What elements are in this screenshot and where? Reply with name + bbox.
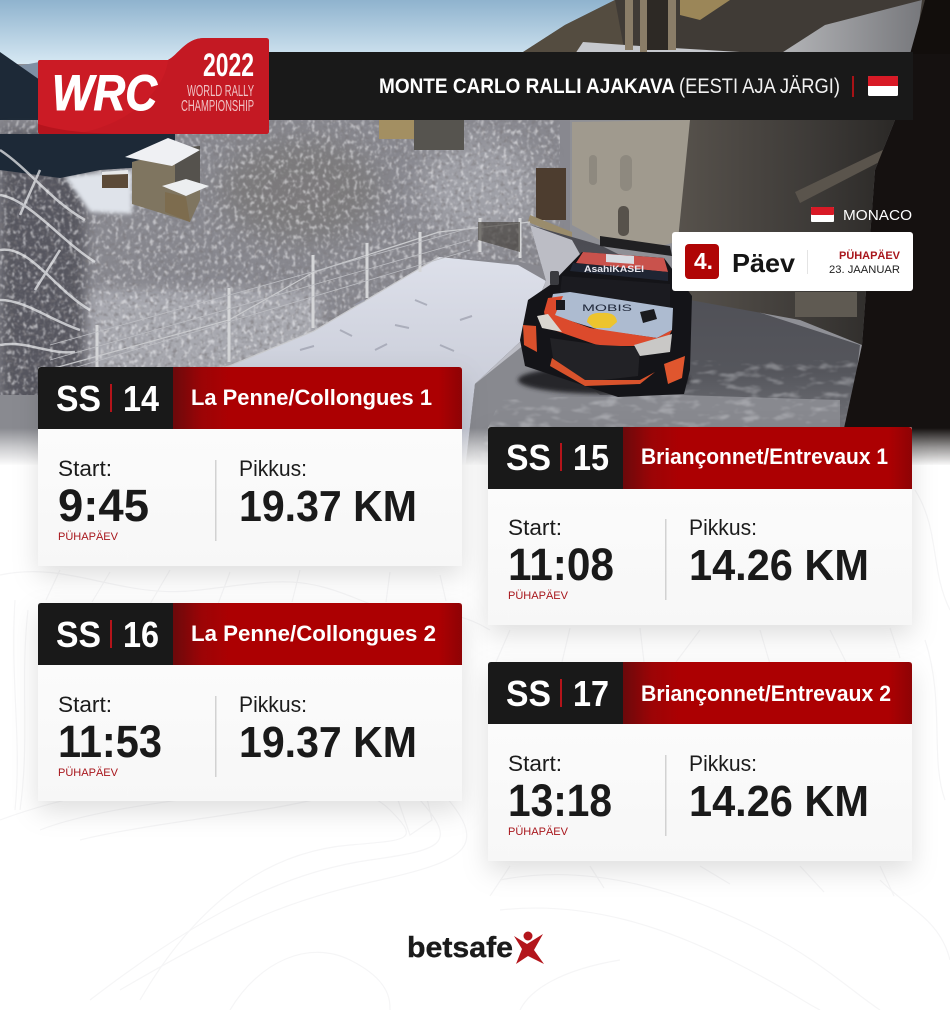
card: SS 15: SS bbox=[506, 437, 551, 478]
card: SS 17: Start: bbox=[508, 751, 562, 776]
card: SS 17: 13:18 bbox=[508, 775, 612, 826]
card: SS 15: 15 bbox=[573, 437, 609, 478]
card: SS 16: SS bbox=[56, 614, 101, 655]
card: SS 17: Pikkus: bbox=[689, 751, 757, 776]
card: SS 15: 11:08 bbox=[508, 539, 614, 590]
World Rally Championship: CHAMPIONSHIP bbox=[181, 98, 254, 115]
header bar bbox=[268, 52, 913, 120]
footprints bbox=[300, 300, 472, 351]
icon: Monaco flag bbox=[868, 76, 898, 96]
rally car: MOBIS bbox=[582, 303, 632, 313]
World Rally Championship: WORLD RALLY bbox=[187, 83, 254, 100]
card: SS 16: 16 bbox=[123, 614, 159, 655]
card: SS 16: 11:53 bbox=[58, 716, 162, 767]
houses bbox=[102, 172, 128, 188]
rally car: AsahiKASEI bbox=[584, 264, 644, 274]
card: SS 14: 14 bbox=[123, 378, 159, 419]
day badge: Päev bbox=[732, 248, 796, 278]
card: SS 17 bbox=[488, 662, 912, 861]
card: SS 14: 19.37 KM bbox=[239, 482, 417, 531]
header subtitle: (EESTI AJA JÄRGI) bbox=[679, 75, 840, 98]
card: SS 17: 14.26 KM bbox=[689, 777, 869, 826]
betsafe logo: betsafe bbox=[407, 932, 513, 964]
icon: shell emblem bbox=[587, 313, 617, 328]
card: SS 16: PÜHAPÄEV bbox=[58, 767, 119, 779]
Monaco label bbox=[811, 207, 912, 224]
WRC wordmark: WRC bbox=[52, 65, 158, 121]
card: SS 16: La Penne/Collongues 2 bbox=[191, 621, 436, 646]
day badge bbox=[672, 232, 913, 291]
rally car bbox=[518, 236, 692, 397]
card: SS 14: Start: bbox=[58, 456, 112, 481]
fence bbox=[40, 222, 530, 415]
icon: betsafe figure bbox=[514, 932, 544, 964]
WRC logo bbox=[38, 38, 269, 134]
card: SS 17: 17 bbox=[573, 673, 609, 714]
card: SS 14: La Penne/Collongues 1 bbox=[191, 385, 432, 410]
wooded slope bbox=[0, 120, 570, 420]
card: SS 15: PÜHAPÄEV bbox=[508, 590, 569, 602]
card: SS 17: PÜHAPÄEV bbox=[508, 826, 569, 838]
day badge: PÜHAPÄEV bbox=[839, 249, 901, 262]
World Rally Championship bbox=[181, 83, 254, 115]
mountains bbox=[18, 60, 60, 130]
card: SS 17: SS bbox=[506, 673, 551, 714]
card: SS 16: Pikkus: bbox=[239, 692, 307, 717]
header title: MONTE CARLO RALLI AJAKAVA bbox=[379, 75, 675, 98]
day badge: 23. JAANUAR bbox=[829, 264, 900, 276]
card: SS 15: Briançonnet/Entrevaux 1 bbox=[641, 444, 888, 469]
card: SS 16: Start: bbox=[58, 692, 112, 717]
church wall bbox=[572, 120, 690, 245]
card: SS 14 bbox=[38, 367, 462, 566]
card: SS 17: Briançonnet/Entrevaux 2 bbox=[641, 681, 891, 706]
2022: 2022 bbox=[203, 47, 254, 83]
card: SS 16 bbox=[38, 603, 462, 801]
fade from photo to white bbox=[0, 428, 950, 466]
day badge: 4. bbox=[694, 248, 713, 274]
card: SS 15 bbox=[488, 427, 912, 625]
topographic background lines bbox=[0, 490, 950, 1010]
card: SS 14: 9:45 bbox=[58, 480, 149, 531]
card: SS 15: Pikkus: bbox=[689, 515, 757, 540]
card: SS 15: Start: bbox=[508, 515, 562, 540]
background photo: snowy village road bbox=[0, 0, 950, 470]
card: SS 14: SS bbox=[56, 378, 101, 419]
card: SS 16: 19.37 KM bbox=[239, 718, 417, 767]
card: SS 14: Pikkus: bbox=[239, 456, 307, 481]
Monaco label: MONACO bbox=[843, 207, 912, 224]
card: SS 14: PÜHAPÄEV bbox=[58, 531, 119, 543]
snow field bbox=[0, 257, 546, 470]
card: SS 15: 14.26 KM bbox=[689, 541, 869, 590]
road bbox=[465, 225, 860, 470]
